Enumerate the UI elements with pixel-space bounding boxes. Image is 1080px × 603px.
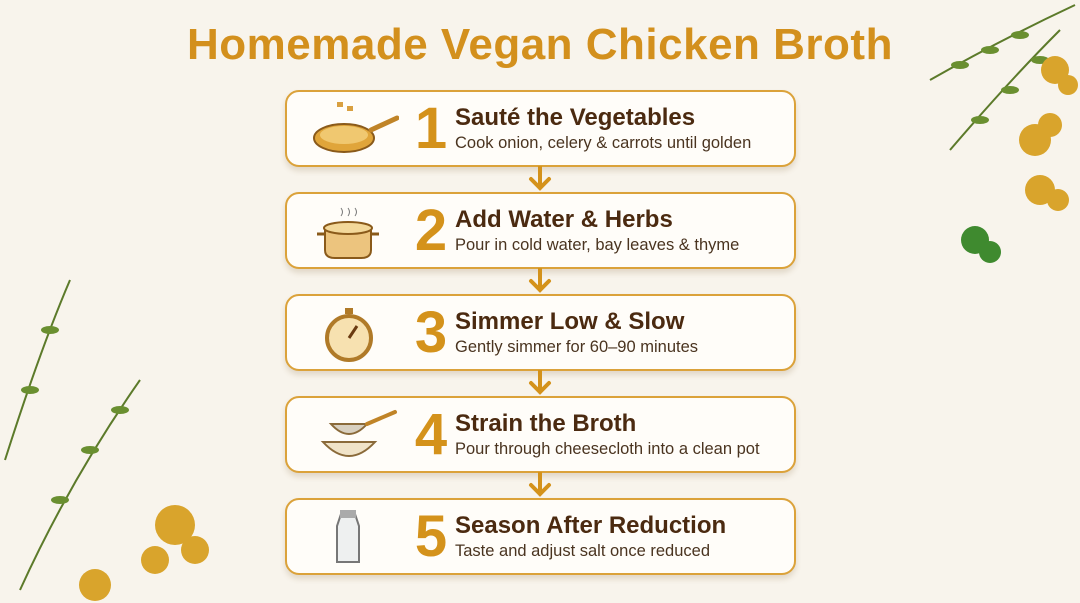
text: Pour in cold water, bay leaves & thyme xyxy=(455,236,739,254)
decoration: herbs bottom left xyxy=(4,280,209,601)
number: 2 xyxy=(415,198,447,263)
number: 3 xyxy=(415,300,447,365)
heading: Season After Reduction xyxy=(455,512,726,539)
arrow xyxy=(528,268,552,293)
icon: salt shaker xyxy=(336,510,360,563)
arrow xyxy=(528,472,552,497)
step 5 xyxy=(285,498,796,575)
decoration: herbs top right xyxy=(930,4,1078,263)
arrow xyxy=(528,370,552,395)
heading: Strain the Broth xyxy=(455,410,636,437)
step 1 xyxy=(285,90,796,167)
heading: Simmer Low & Slow xyxy=(455,308,684,335)
text: Gently simmer for 60–90 minutes xyxy=(455,338,698,356)
heading: Sauté the Vegetables xyxy=(455,104,695,131)
text: Pour through cheesecloth into a clean pot xyxy=(455,440,760,458)
step 2 xyxy=(285,192,796,269)
icon: pot xyxy=(317,208,379,259)
title: Homemade Vegan Chicken Broth xyxy=(187,20,893,69)
number: 1 xyxy=(415,96,447,161)
number: 4 xyxy=(415,402,447,467)
icon: pan xyxy=(313,102,399,153)
arrow xyxy=(528,166,552,191)
step 3 xyxy=(285,294,796,371)
step 4 xyxy=(285,396,796,473)
heading: Add Water & Herbs xyxy=(455,206,673,233)
icon: strainer xyxy=(320,410,398,457)
text: Cook onion, celery & carrots until golden xyxy=(455,134,751,152)
text: Taste and adjust salt once reduced xyxy=(455,542,710,560)
number: 5 xyxy=(415,504,447,569)
icon: timer xyxy=(325,308,373,362)
